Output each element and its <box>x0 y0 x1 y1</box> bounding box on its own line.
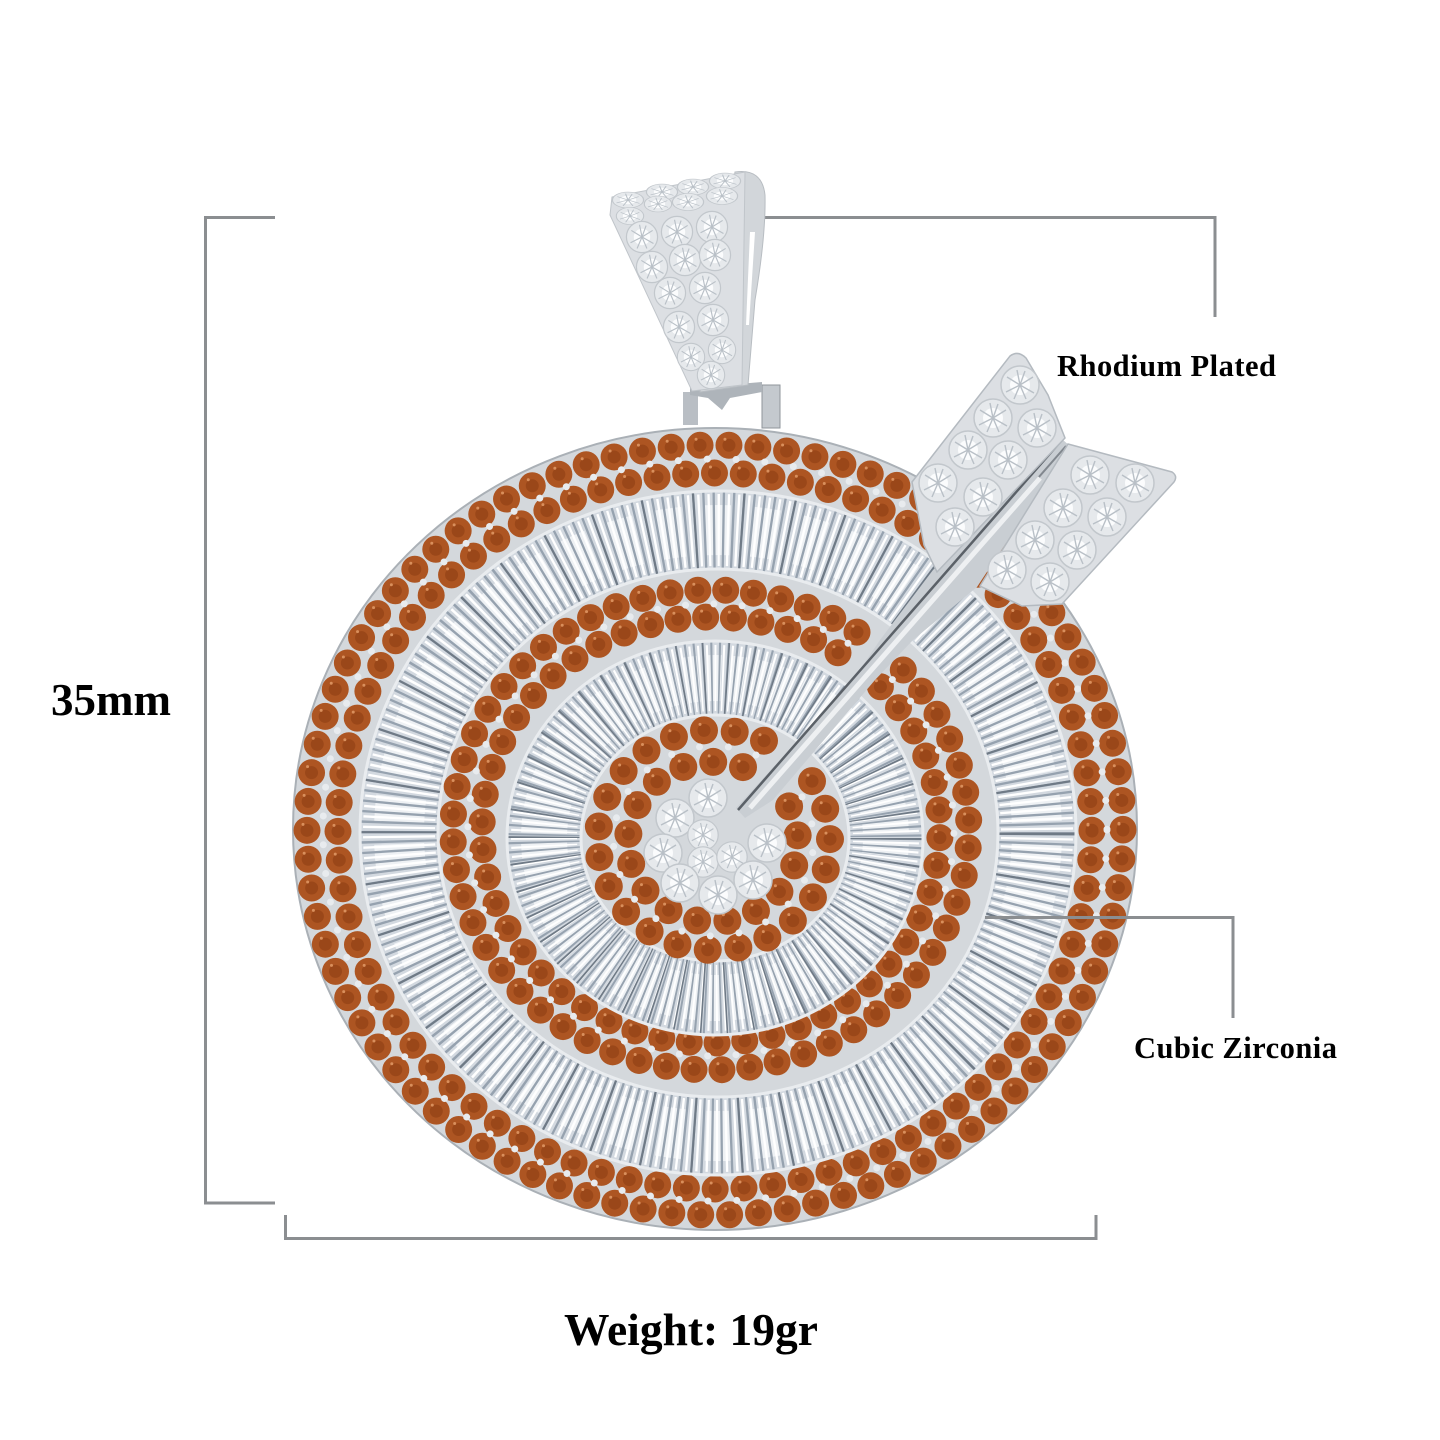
dimension: width bracket <box>286 1215 1096 1238</box>
target disc <box>293 428 1137 1230</box>
bail slot <box>746 232 755 325</box>
right fletching <box>980 444 1176 606</box>
outer baguette band <box>360 491 1076 1175</box>
disc base <box>293 428 1137 1230</box>
center white stones <box>644 779 786 914</box>
leader line: cubic zirconia <box>985 918 1233 1018</box>
label: cubic zirconia: Cubic Zirconia <box>1134 1031 1337 1065</box>
label: height: 35mm <box>51 675 171 725</box>
middle orange band <box>449 584 969 1070</box>
dimension: height bracket <box>206 218 275 1203</box>
bail <box>610 171 765 392</box>
jump ring connector <box>683 382 780 428</box>
label: weight: Weight: 19gr <box>564 1304 818 1355</box>
bail plate <box>610 172 745 391</box>
label: rhodium plated: Rhodium Plated <box>1057 349 1276 383</box>
bail stones <box>612 173 741 389</box>
left fletching <box>912 353 1065 572</box>
arrow shaft <box>736 440 1070 818</box>
bail side band <box>700 171 765 392</box>
inner orange band <box>594 724 830 950</box>
inner baguette band <box>507 641 923 1035</box>
arrow <box>736 353 1176 818</box>
leader line: rhodium plated <box>762 218 1215 317</box>
outer orange band <box>303 439 1123 1215</box>
